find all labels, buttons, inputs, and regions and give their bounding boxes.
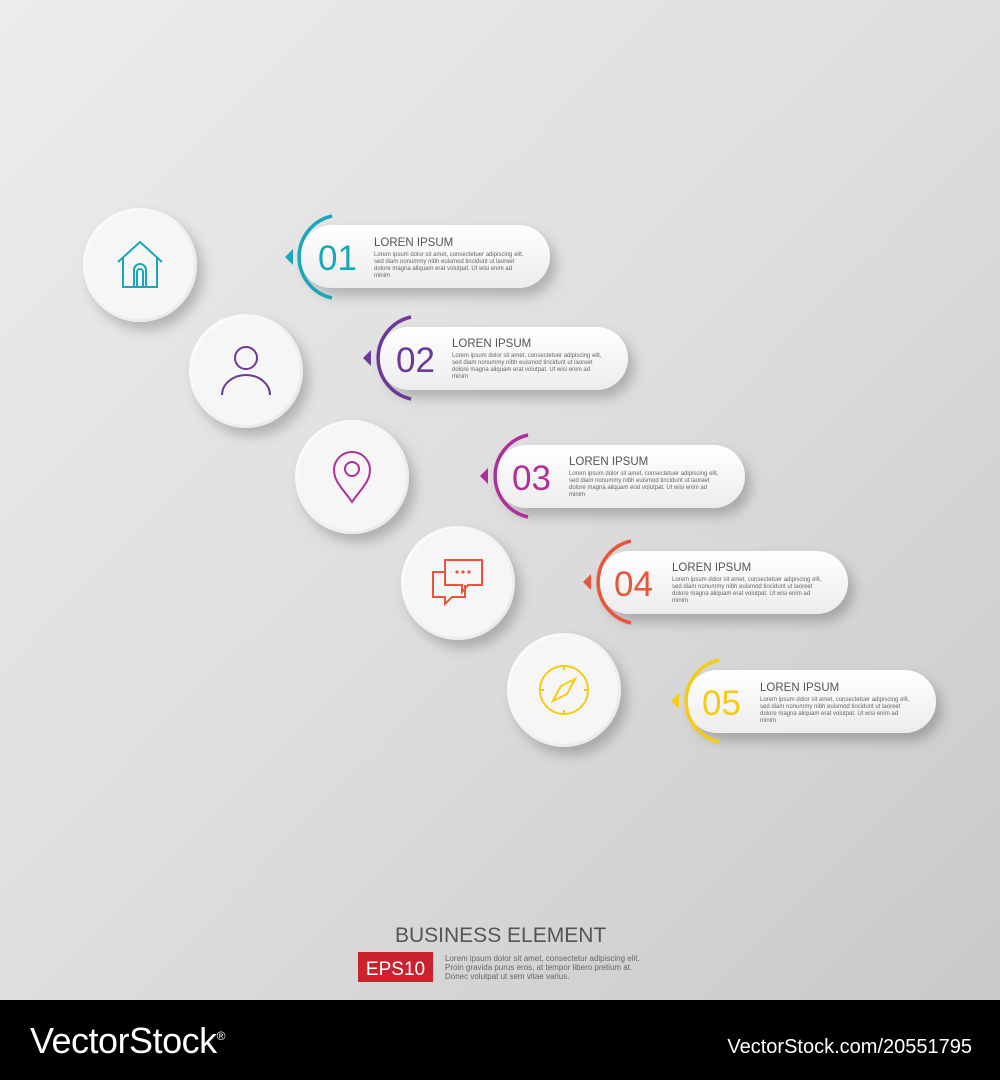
pill 4: Lorem ipsum dolor sit amet, consectetuer adipiscing elit, [672,577,822,583]
icon circle: user [189,314,303,428]
pill 1: minim [374,273,390,279]
pill 1: 01 [318,239,357,278]
pill 4: 04 [614,565,653,604]
url: VectorStock.com/20551795 [727,1036,972,1058]
pill 4: sed diam nonummy nibh euismod tincidunt ut laoreet [672,584,813,590]
pill 4: LOREN IPSUM [672,562,751,574]
EPS10 badge [358,952,433,982]
pill 2: dolore magna aliquam erat volutpat. Ut wisi enim ad [452,367,590,373]
pill 2 [363,317,628,399]
brand: VectorStock® [30,1020,225,1061]
pill 5: dolore magna aliquam erat volutpat. Ut wisi enim ad [760,711,898,717]
pill 1: dolore magna aliquam erat volutpat. Ut wisi enim ad [374,266,512,272]
icon circle: compass [507,633,621,747]
pill 3: dolore magna aliquam erat volutpat. Ut wisi enim ad [569,485,707,491]
pill 5: minim [760,718,776,724]
footer text: Proin gravida purus eros, at tempor libero pretium at. [445,963,632,972]
EPS10 badge: EPS10 [366,959,425,980]
pill 5: sed diam nonummy nibh euismod tincidunt ut laoreet [760,704,901,710]
pill 5: Lorem ipsum dolor sit amet, consectetuer adipiscing elit, [760,697,910,703]
pill 4 [583,541,848,623]
pill 4: dolore magna aliquam erat volutpat. Ut wisi enim ad [672,591,810,597]
pill 2: 02 [396,341,435,380]
pill 3: sed diam nonummy nibh euismod tincidunt ut laoreet [569,478,710,484]
step 1 [83,208,550,322]
pill 3: LOREN IPSUM [569,456,648,468]
pill 2: minim [452,374,468,380]
pill 5 [671,660,936,742]
icon circle: location pin [295,420,409,534]
pill 1: Lorem ipsum dolor sit amet, consectetuer adipiscing elit, [374,252,524,258]
footer text: Donec volutpat ut sem vitae varius. [445,972,570,981]
watermark bar [0,1000,1000,1080]
pill 2: Lorem ipsum dolor sit amet, consectetuer adipiscing elit, [452,353,602,359]
pill 3: minim [569,492,585,498]
pill 2: LOREN IPSUM [452,338,531,350]
pill 3 [480,435,745,517]
pill 1: sed diam nonummy nibh euismod tincidunt ut laoreet [374,259,515,265]
step 5 [507,633,936,747]
step 4 [401,526,848,640]
step 2 [189,314,628,428]
pill 5: LOREN IPSUM [760,682,839,694]
pill 1: LOREN IPSUM [374,237,453,249]
footer heading: BUSINESS ELEMENT [395,924,606,947]
footer text: Lorem ipsum dolor sit amet, consectetur adipiscing elit. [445,954,640,963]
pill 1 [285,216,550,298]
pill 4: minim [672,598,688,604]
pill 2: sed diam nonummy nibh euismod tincidunt ut laoreet [452,360,593,366]
pill 3: 03 [512,459,551,498]
step 3 [295,420,745,534]
icon circle: home [83,208,197,322]
icon circle: chat [401,526,515,640]
pill 5: 05 [702,684,741,723]
pill 3: Lorem ipsum dolor sit amet, consectetuer adipiscing elit, [569,471,719,477]
